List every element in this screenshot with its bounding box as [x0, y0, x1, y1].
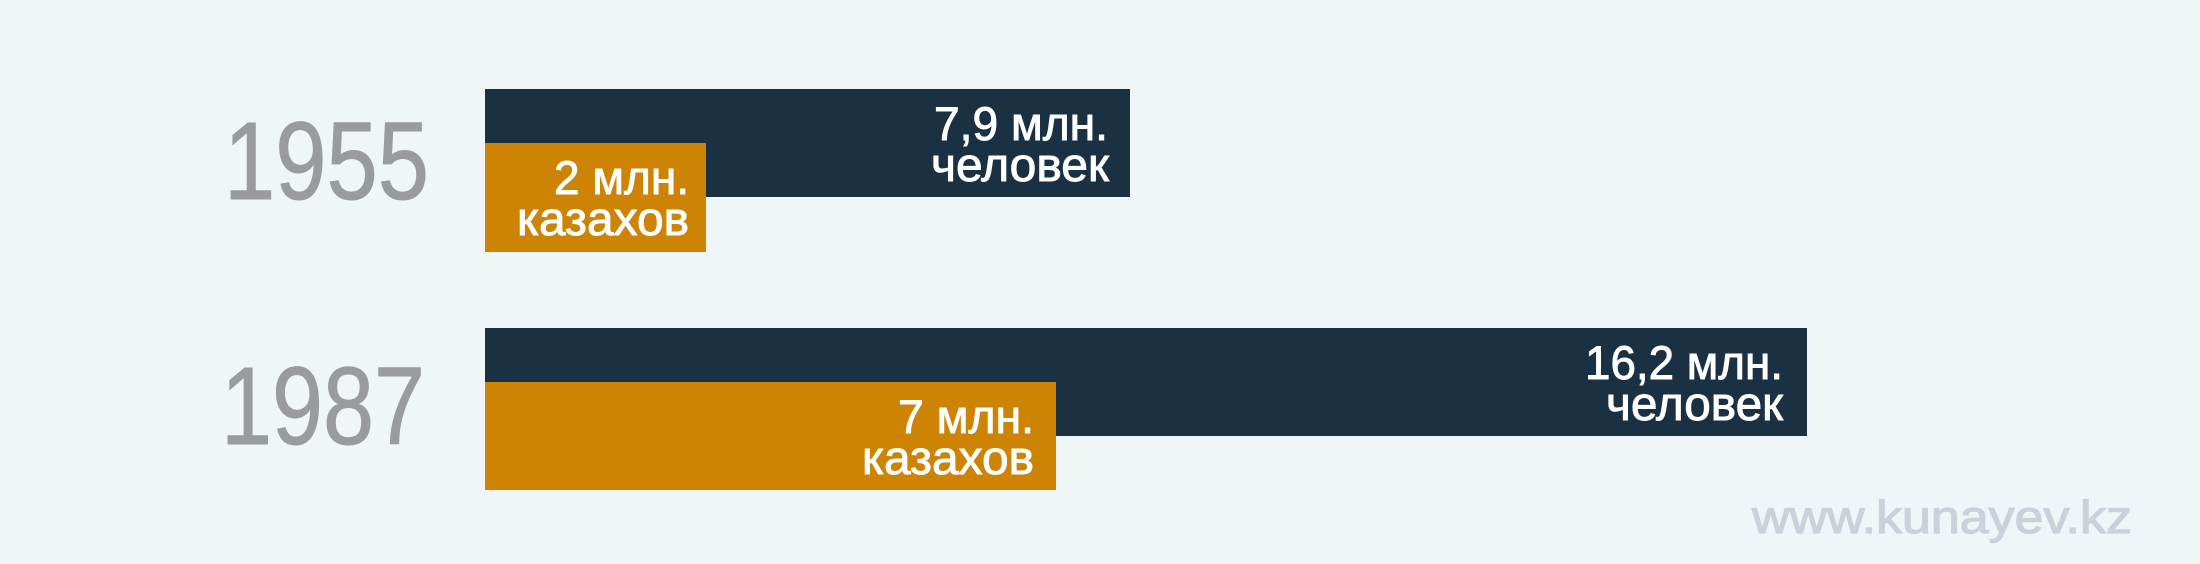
- bar label: 16,2 million people: 16,2 млн.: [1585, 336, 1783, 389]
- bar label: 7 million Kazakhs: 7 млн.: [898, 390, 1034, 443]
- row: 1955: [224, 89, 1130, 252]
- bar label: 16,2 million people: [1585, 336, 1783, 430]
- bar: total population 1987: [485, 328, 1807, 436]
- bar label: 7,9 million people: [931, 97, 1109, 191]
- bar label: 7 million Kazakhs: [862, 390, 1034, 484]
- bar label: 7,9 million people: человек: [931, 138, 1109, 191]
- watermark: website: www.kunayev.kz: [1751, 491, 2132, 543]
- bar: Kazakhs 1987: [485, 382, 1056, 490]
- year label: 1987: 1987: [221, 345, 425, 468]
- year label: 1955: 1955: [224, 100, 429, 223]
- bar label: 7,9 million people: 7,9 млн.: [934, 97, 1108, 150]
- bar: Kazakhs 1955: [485, 143, 706, 252]
- bar label: 2 million Kazakhs: 2 млн.: [554, 151, 689, 204]
- bar label: 2 million Kazakhs: [517, 151, 689, 245]
- bar label: 2 million Kazakhs: казахов: [517, 192, 689, 245]
- bar: total population 1955: [485, 89, 1130, 197]
- bar label: 7 million Kazakhs: казахов: [862, 431, 1034, 484]
- bar label: 16,2 million people: человек: [1606, 377, 1783, 430]
- row: 1987: [221, 328, 1807, 490]
